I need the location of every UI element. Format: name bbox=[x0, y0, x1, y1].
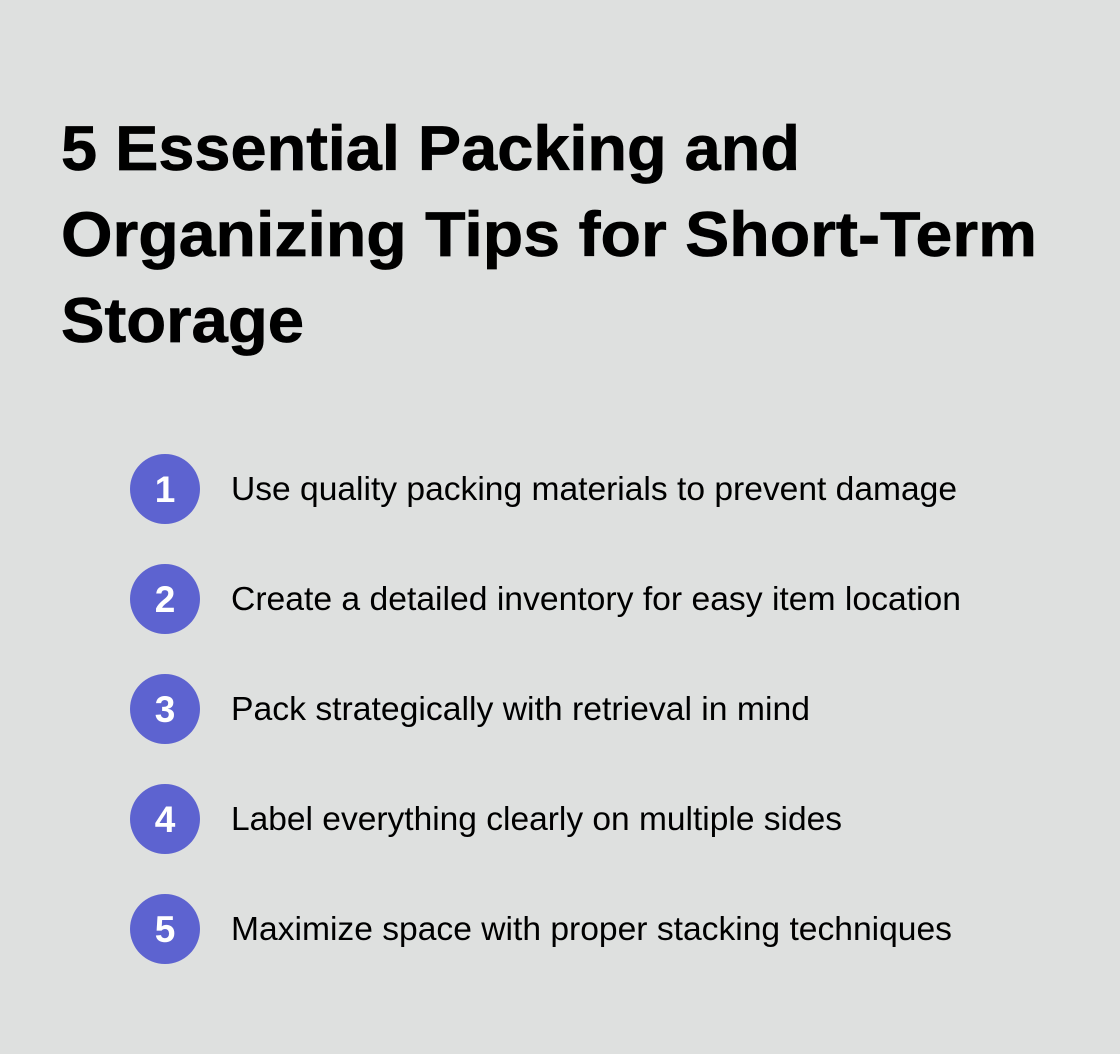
tip 5 bbox=[130, 894, 952, 964]
title: Organizing Tips for Short-Term bbox=[61, 200, 1037, 270]
tip 4 bbox=[130, 784, 842, 854]
tip 3: 3 bbox=[155, 689, 175, 730]
tip 2 bbox=[130, 564, 961, 634]
tip 3 bbox=[130, 674, 810, 744]
tip 1: Use quality packing materials to prevent damage bbox=[231, 470, 957, 507]
title: Storage bbox=[61, 286, 304, 356]
tip 2: 2 bbox=[155, 579, 175, 620]
tip 2: Create a detailed inventory for easy item location bbox=[231, 580, 961, 617]
tip 5: Maximize space with proper stacking techniques bbox=[231, 910, 952, 947]
tip 4: Label everything clearly on multiple sides bbox=[231, 800, 842, 837]
tip 1 bbox=[130, 454, 957, 524]
title: 5 Essential Packing and bbox=[61, 114, 800, 184]
tip 1: 1 bbox=[155, 469, 175, 510]
tip 5: 5 bbox=[155, 909, 175, 950]
tip 3: Pack strategically with retrieval in mind bbox=[231, 690, 810, 727]
list of tips bbox=[130, 454, 961, 964]
tip 4: 4 bbox=[155, 799, 176, 840]
title bbox=[61, 114, 1037, 356]
